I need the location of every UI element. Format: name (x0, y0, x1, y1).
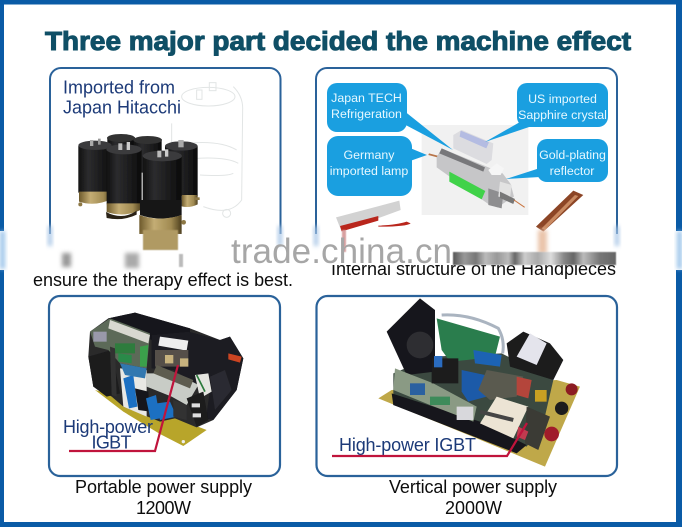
watermark text: trade.china.cn (231, 232, 452, 271)
callout: Germany imported lamp (327, 136, 427, 196)
watermark band (0, 226, 682, 271)
callout: Germany imported lamp: imported lamp (330, 164, 408, 178)
caption: Vertical power supply 2000W: 2000W (445, 498, 502, 518)
caption: Vertical power supply 2000W (389, 477, 557, 518)
caption: ensure the therapy effect is best: ensure the therapy effect is best. (33, 270, 293, 290)
panel: vertical power supply (316, 296, 617, 476)
leader line: vertical IGBT (332, 423, 527, 456)
callout: Gold-plating reflector: Gold-plating (539, 148, 606, 162)
capacitor group (78, 134, 200, 235)
leader line: portable IGBT (69, 365, 178, 451)
label: Imported from Japan Hitacchi: Japan Hitacchi (63, 98, 181, 118)
caption: Vertical power supply 2000W: Vertical power supply (389, 477, 557, 497)
panel frame: vertical (316, 296, 617, 476)
label: High-power IGBT: High-power IGBT (339, 435, 476, 455)
panel frame: portable (49, 296, 280, 476)
caption: Internal structure of the Handpieces: Internal structure of the Handpieces (331, 259, 616, 279)
callout: Gold-plating reflector: reflector (550, 164, 594, 178)
circuit board: vertical (378, 298, 580, 467)
panel frame: capacitors (50, 68, 280, 248)
callout: Japan TECH Refrigeration (327, 83, 453, 150)
caption: Portable power supply 1200W: Portable power supply (75, 477, 252, 497)
caption: Portable power supply 1200W: 1200W (136, 498, 191, 518)
ghost cylinder outline (172, 83, 243, 217)
callout: Japan TECH Refrigeration: Japan TECH (331, 91, 402, 105)
panel: capacitors (50, 68, 280, 248)
callout: Gold-plating reflector (506, 139, 608, 182)
callout: US imported Sapphire crystal: US imported (528, 92, 597, 106)
label: Imported from Japan Hitacchi: Imported from (63, 78, 175, 98)
caption: Portable power supply 1200W (75, 477, 252, 518)
callout: Japan TECH Refrigeration: Refrigeration (331, 107, 402, 121)
handpiece device (422, 125, 528, 215)
label: High-power IGBT: IGBT (92, 432, 132, 452)
reflector part (536, 191, 583, 232)
panel frame: handpiece (316, 68, 617, 248)
title: Three major part decided the machine effect (45, 28, 632, 56)
panel: handpiece internals (316, 68, 617, 248)
circuit board: portable (88, 313, 243, 446)
callout: Germany imported lamp: Germany (344, 148, 395, 162)
label: High-power IGBT: High-power (63, 417, 153, 437)
label: High-power IGBT (63, 417, 153, 452)
label: Imported from Japan Hitacchi (63, 78, 181, 118)
callout: US imported Sapphire crystal (485, 83, 608, 142)
lamp part (336, 201, 411, 232)
callout: US imported Sapphire crystal: Sapphire crystal (518, 108, 607, 122)
panel: portable power supply (49, 296, 280, 476)
